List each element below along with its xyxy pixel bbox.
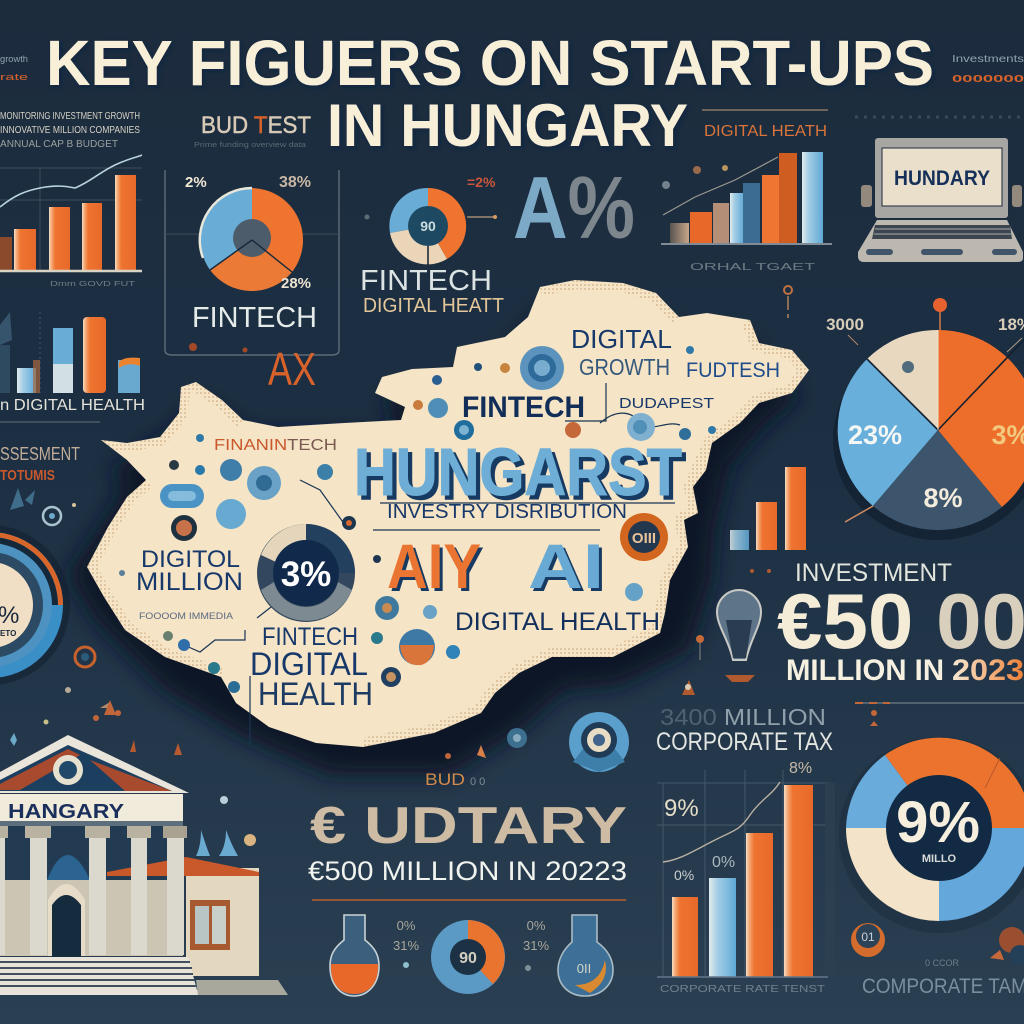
map labels: FINTECH [462,391,585,424]
map title hungarst: HUNGARST [358,439,686,514]
investment figure: €50 00 [777,577,1024,665]
big pie chart [826,298,1024,540]
icon: flask right [558,915,613,996]
donut small 90 [431,920,505,994]
text block top left [0,111,140,150]
label digital health amber: DIGITAL HEATT [363,295,504,317]
bar chart corporate tax: 0% [712,854,735,871]
small tan icons near bulb [682,569,771,695]
bar chart corporate tax: CORPORATE RATE TENST [660,984,825,995]
budget euro figure: €500 MILLION IN 20223 [308,856,627,886]
pin small above map right [784,286,792,318]
gauge left: ETO [0,629,16,638]
small labels around flasks [393,918,549,971]
budget test heading: Prime funding overview data [194,142,306,149]
assessment heading left [0,422,100,484]
donut chart fintech: =2% [467,174,496,190]
map connector lines [184,383,680,745]
map labels: FUDTESH [686,359,780,382]
bar chart digital health right [661,110,832,273]
icon: flask left [330,915,379,996]
panel: pie chart fintech: FINTECH [192,302,317,334]
bar chart digital health right: DIGITAL HEATH [704,123,827,140]
big pie chart: 8% [923,483,963,513]
small icons below map [10,700,182,755]
shadow of map [68,300,800,775]
map AI labels: AIY [387,532,481,602]
bar chart corporate tax [657,760,830,995]
investment figure: INVESTMENT [795,559,952,587]
map labels: MILLION [136,568,243,596]
small icons left [10,488,76,525]
map donut 3%: 3% [281,555,331,594]
map labels: DIGITAL HEALTH [455,608,660,636]
panel: pie chart fintech: 2% [185,174,207,191]
corporate tax heading [656,704,833,756]
corner icon bottom right [925,927,1024,968]
map AI labels: AI [531,535,607,605]
map labels: GROWTH [579,354,670,380]
big A percent label: A% [513,158,635,257]
corner icon bottom right: 0 CCOR [925,958,960,968]
map of Hungary [87,280,809,747]
big pie chart: 23% [848,420,902,450]
text block top left: MONITORING INVESTMENT GROWTH [0,111,140,122]
bar chart corporate tax: 8% [789,760,812,777]
corporate tax heading: CORPORATE TAX [656,728,833,756]
big pie chart: 3000 [826,315,864,334]
temple right wing [107,830,259,976]
panel: pie chart fintech: 28% [281,275,311,292]
donut chart fintech [364,174,497,265]
coin icon [851,923,885,957]
corner notes right of title: Investments [952,54,1024,65]
bar chart digital health [0,312,140,393]
bar chart digital health right: ORHAL TGAET [690,262,815,273]
donut small 90: 90 [459,950,477,967]
budget euro figure: BUD [425,770,465,789]
map labels: FINTECH [262,623,358,651]
donut chart 9%: MILLO [922,853,957,865]
temple columns [0,826,187,955]
corner notes right of title: 0000000 [952,74,1024,85]
gauge left [0,525,70,685]
corner notes right of title [952,54,1024,85]
label AX: AX [268,343,316,395]
donut chart 9% [839,737,1024,933]
map labels: HEALTH [258,676,373,712]
label fintech: FINTECH [360,265,492,297]
label digital health: n DIGITAL HEALTH [0,397,145,414]
map AI labels: AIY [390,535,484,605]
title: IN HUNGARY [327,92,688,159]
map coin AI [620,513,668,561]
investment figure [777,559,1024,687]
map labels: DIGITAL [250,646,368,682]
map labels: DIGITOL [141,546,240,573]
small bar chart center right [730,467,806,550]
title [46,27,934,159]
map labels: INVESTRY DISRIBUTION [387,501,627,523]
donut chart 9%: 9% [896,790,980,855]
panel: pie chart fintech: 38% [279,174,311,191]
icon: temple with Hungary label: HANGARY [8,801,125,823]
assessment heading left: TOTUMIS [0,467,55,484]
coin icon: 01 [861,930,875,944]
decorative icons center bottom [220,728,527,846]
budget test heading: BUD TEST [201,112,311,139]
map icon circles [119,346,716,693]
bar chart top left: Dmm GOVD FUT [50,281,136,288]
dotted divider with marks [855,703,1024,726]
bar chart corporate tax: 9% [664,795,699,822]
map AI labels [387,532,607,605]
map labels: DUDAPEST [619,395,714,412]
budget test heading [194,112,311,149]
investment figure: MILLION IN [786,654,944,687]
text block top left: INNOVATIVE MILLION COMPANIES [0,125,140,136]
bar chart corporate tax: 0% [674,867,694,883]
corporate tax heading: 3400 MILLION [660,704,826,730]
icon: target top of budget [569,712,629,772]
budget euro figure: 0 0 [470,776,485,788]
map AI labels: AI [528,532,604,602]
small labels around flasks: 31% [523,938,549,953]
temple steps [0,957,288,995]
icon: laptop hungary [855,117,1024,262]
investment figure: 2023 [952,654,1024,687]
map labels: DIGITAL [571,324,672,354]
corner notes left of title: growth [0,54,28,64]
bar chart top left [0,155,142,288]
map title hungarst: HUNGARST [354,435,682,510]
budget euro figure [308,770,627,900]
budget euro figure: € UDTARY [310,797,627,855]
map labels [136,324,780,712]
small labels around flasks: 31% [393,938,419,953]
icon: temple with Hungary label [0,735,288,995]
map labels: FOOOOM IMMEDIA [139,611,233,621]
small labels around flasks: 0% [527,918,546,933]
panel: pie chart fintech [165,170,339,355]
map labels: FINANIN TECH [214,437,337,454]
icon: laptop hungary: HUNDARY [894,167,990,190]
small labels around flasks: 0% [397,918,416,933]
icon: light bulb [696,590,761,660]
map donut 3% [257,524,355,622]
donut chart fintech: 90 [420,218,436,234]
icon: flask right: 0II [577,961,591,976]
map coin AI: OIII [632,530,656,547]
corner notes left of title: rate [0,72,28,82]
title: KEY FIGUERS ON START-UPS [46,27,934,99]
corner notes left of title [0,54,28,82]
assessment heading left: SSESMENT [0,444,80,464]
small orange icon left [65,647,110,708]
text block top left: ANNUAL CAP B BUDGET [0,139,118,150]
